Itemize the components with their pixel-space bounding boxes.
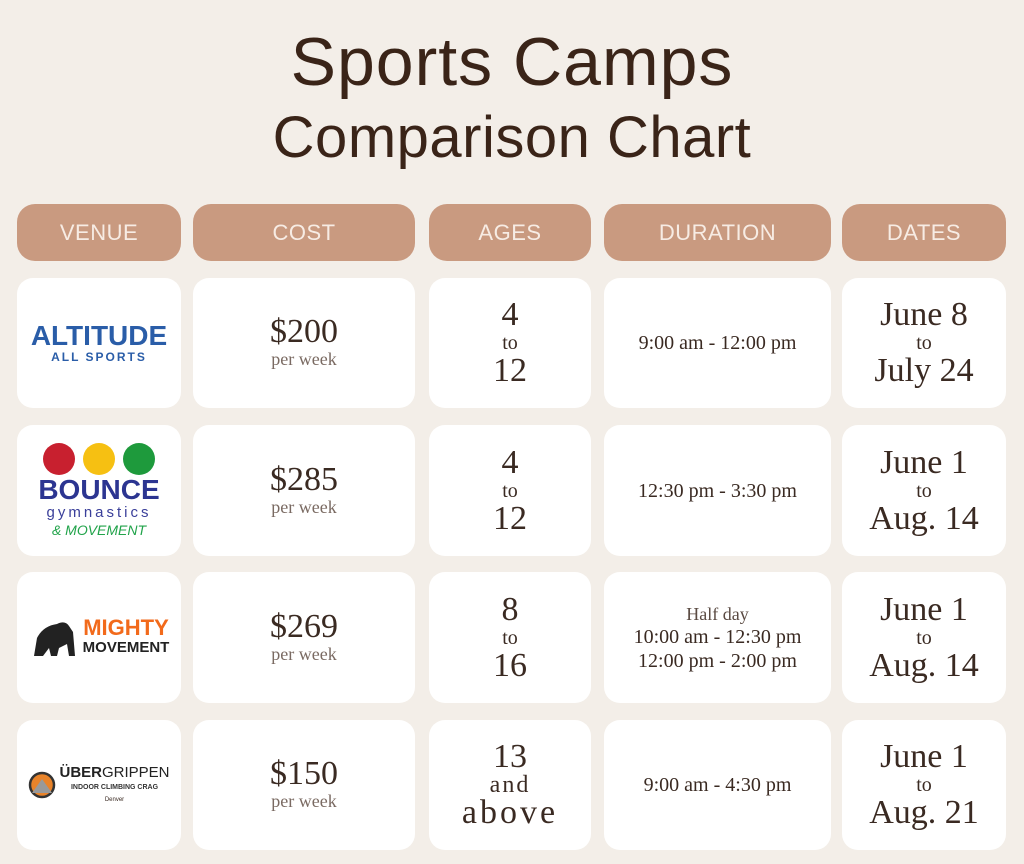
logo: bounce: gymnastics [46,504,152,520]
dates row 2 [842,425,1006,556]
dates row 3: to [916,626,932,648]
dates row 2: Aug. 14 [869,500,979,536]
cost row 1: $200 [270,313,338,350]
logo: bounce [17,425,181,556]
cost row 4: $150 [270,755,338,792]
logo: mighty movement [17,572,181,703]
title: Sports Camps [291,24,733,100]
title [273,24,751,170]
ages row 3: to [502,626,518,648]
logo: altitude [17,278,181,408]
logo: altitude: ALTITUDE [31,320,167,351]
duration row 2 [604,425,831,556]
header: duration: DURATION [659,220,776,244]
cost row 1 [193,278,415,408]
dates row 4 [842,720,1006,850]
cost row 2: $285 [270,460,338,498]
duration row 4 [604,720,831,850]
header: cost [193,204,415,261]
cost row 4: per week [271,791,337,811]
duration row 4: 9:00 am - 4:30 pm [644,774,791,796]
logo: mighty movement: MIGHTY [83,614,169,640]
ages row 4: 13 [493,738,527,775]
cost row 3: per week [271,644,337,664]
logo: bounce: & MOVEMENT [52,522,146,538]
duration row 3: 10:00 am - 12:30 pm [634,626,801,648]
header: venue [17,204,181,261]
ages row 4 [429,720,591,850]
header: dates: DATES [887,220,961,244]
dates row 1: July 24 [874,352,974,389]
cost row 2 [193,425,415,556]
header: cost: COST [272,220,336,244]
cost row 4 [193,720,415,850]
logo: ubergrippen: INDOOR CLIMBING CRAG [71,784,158,791]
ages row 4: above [462,794,558,831]
ages row 3: 16 [493,646,527,684]
dates row 2: June 1 [880,444,968,480]
duration row 2: 12:30 pm - 3:30 pm [638,480,797,502]
cost row 1: per week [271,349,337,369]
header: duration [604,204,831,261]
ages row 3: 8 [502,590,518,628]
logo: ubergrippen: ÜBERGRIPPEN [59,764,170,781]
header: ages: AGES [478,220,542,244]
logo: ubergrippen [17,720,181,850]
dates row 1: June 8 [880,296,968,333]
ages row 2: 12 [493,500,527,536]
dates row 3: June 1 [880,590,968,628]
ages row 2 [429,425,591,556]
ages row 1 [429,278,591,408]
ages row 1: to [502,332,518,354]
ages row 3 [429,572,591,703]
ages row 2: 4 [502,444,518,480]
dates row 4: Aug. 21 [869,794,979,831]
cost row 2: per week [271,496,337,516]
logo: altitude: ALL SPORTS [51,350,147,364]
dates row 1 [842,278,1006,408]
header: dates [842,204,1006,261]
duration row 3: 12:00 pm - 2:00 pm [638,650,797,672]
header: venue: VENUE [60,220,138,244]
duration row 1 [604,278,831,408]
cost row 3 [193,572,415,703]
title: Comparison Chart [273,105,751,170]
logo: bounce: BOUNCE [38,474,160,504]
dates row 3 [842,572,1006,703]
cost row 3: $269 [270,608,338,644]
ages row 4: and [490,772,530,798]
duration row 1: 9:00 am - 12:00 pm [639,332,796,354]
dates row 3: Aug. 14 [869,646,979,684]
ages row 1: 4 [502,296,518,333]
duration row 3 [604,572,831,703]
header: ages [429,204,591,261]
duration row 3: Half day [686,604,749,624]
dates row 2: to [916,480,932,502]
ages row 2: to [502,480,518,502]
ages row 1: 12 [493,352,527,389]
dates row 1: to [916,332,932,354]
logo: ubergrippen: Denver [105,797,124,803]
logo: mighty movement: MOVEMENT [83,638,169,656]
dates row 4: to [916,774,932,796]
dates row 4: June 1 [880,738,968,775]
